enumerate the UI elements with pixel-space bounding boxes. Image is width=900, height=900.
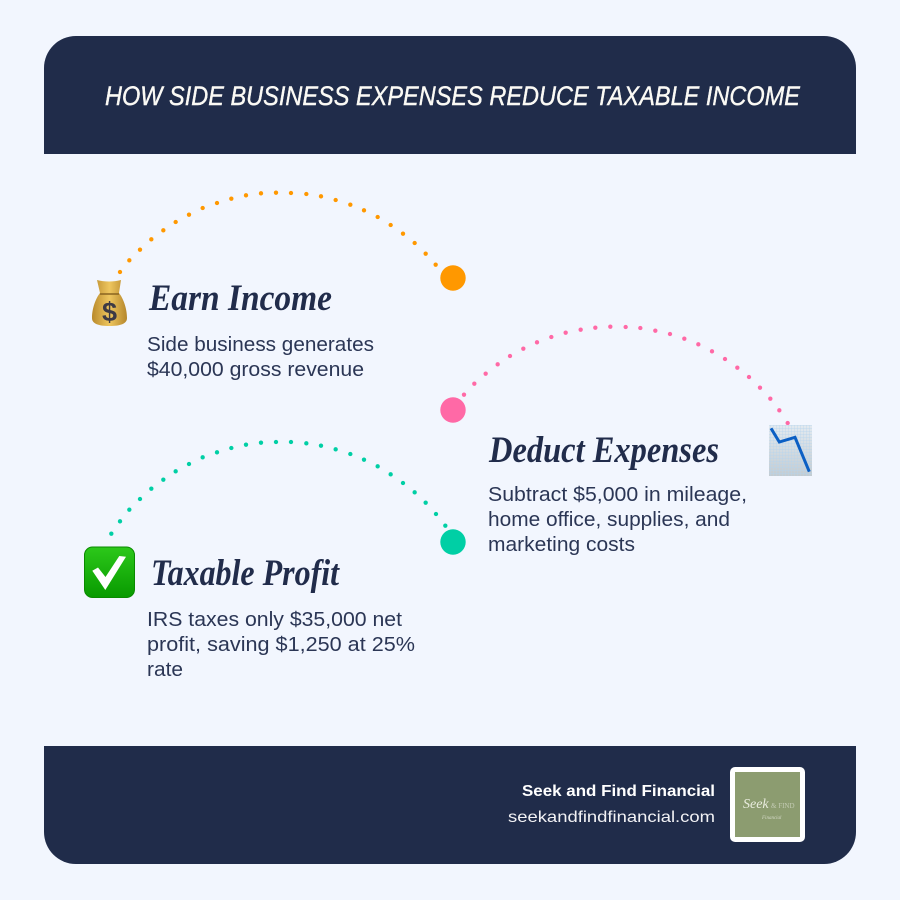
logo: Seek (743, 797, 769, 812)
logo: Financial (761, 816, 782, 821)
icon: falling chart (769, 425, 812, 476)
text: taxable profit description: IRS taxes only $35,000 net (147, 609, 402, 631)
heading: earn income: Earn Income (148, 278, 332, 319)
heading: taxable profit: Taxable Profit (151, 553, 340, 594)
step: earn income (147, 278, 374, 381)
header banner (44, 36, 856, 154)
heading: deduct expenses: Deduct Expenses (488, 430, 719, 471)
dotted arc: orange (118, 190, 438, 274)
text: deduct expenses description: home office, supplies, and (488, 509, 730, 531)
step: taxable profit (147, 553, 415, 681)
node: teal (440, 529, 466, 555)
node: orange (440, 265, 466, 291)
footer banner (44, 746, 856, 864)
text: taxable profit description (147, 609, 415, 681)
text: taxable profit description: rate (147, 659, 183, 681)
footer: website: seekandfindfinancial.com (508, 809, 715, 826)
logo (730, 767, 805, 842)
logo: & FIND (771, 802, 795, 810)
text: earn income description: Side business generates (147, 334, 374, 356)
icon: money bag: $ (102, 297, 117, 327)
node: pink (440, 397, 466, 423)
title: HOW SIDE BUSINESS EXPENSES REDUCE TAXABLE INCOME (105, 81, 801, 111)
text: deduct expenses description: marketing costs (488, 534, 635, 556)
text: earn income description: $40,000 gross revenue (147, 359, 364, 381)
text: deduct expenses description (488, 484, 747, 556)
text: earn income description (147, 334, 374, 381)
step: deduct expenses (488, 430, 747, 556)
text: taxable profit description: profit, saving $1,250 at 25% (147, 634, 415, 656)
footer: brand name: Seek and Find Financial (522, 783, 715, 800)
text: deduct expenses description: Subtract $5,000 in mileage, (488, 484, 747, 506)
icon: check mark (84, 547, 134, 598)
dotted arc: teal (109, 440, 447, 536)
dotted arc: pink (462, 324, 790, 425)
icon: money bag (92, 280, 127, 327)
